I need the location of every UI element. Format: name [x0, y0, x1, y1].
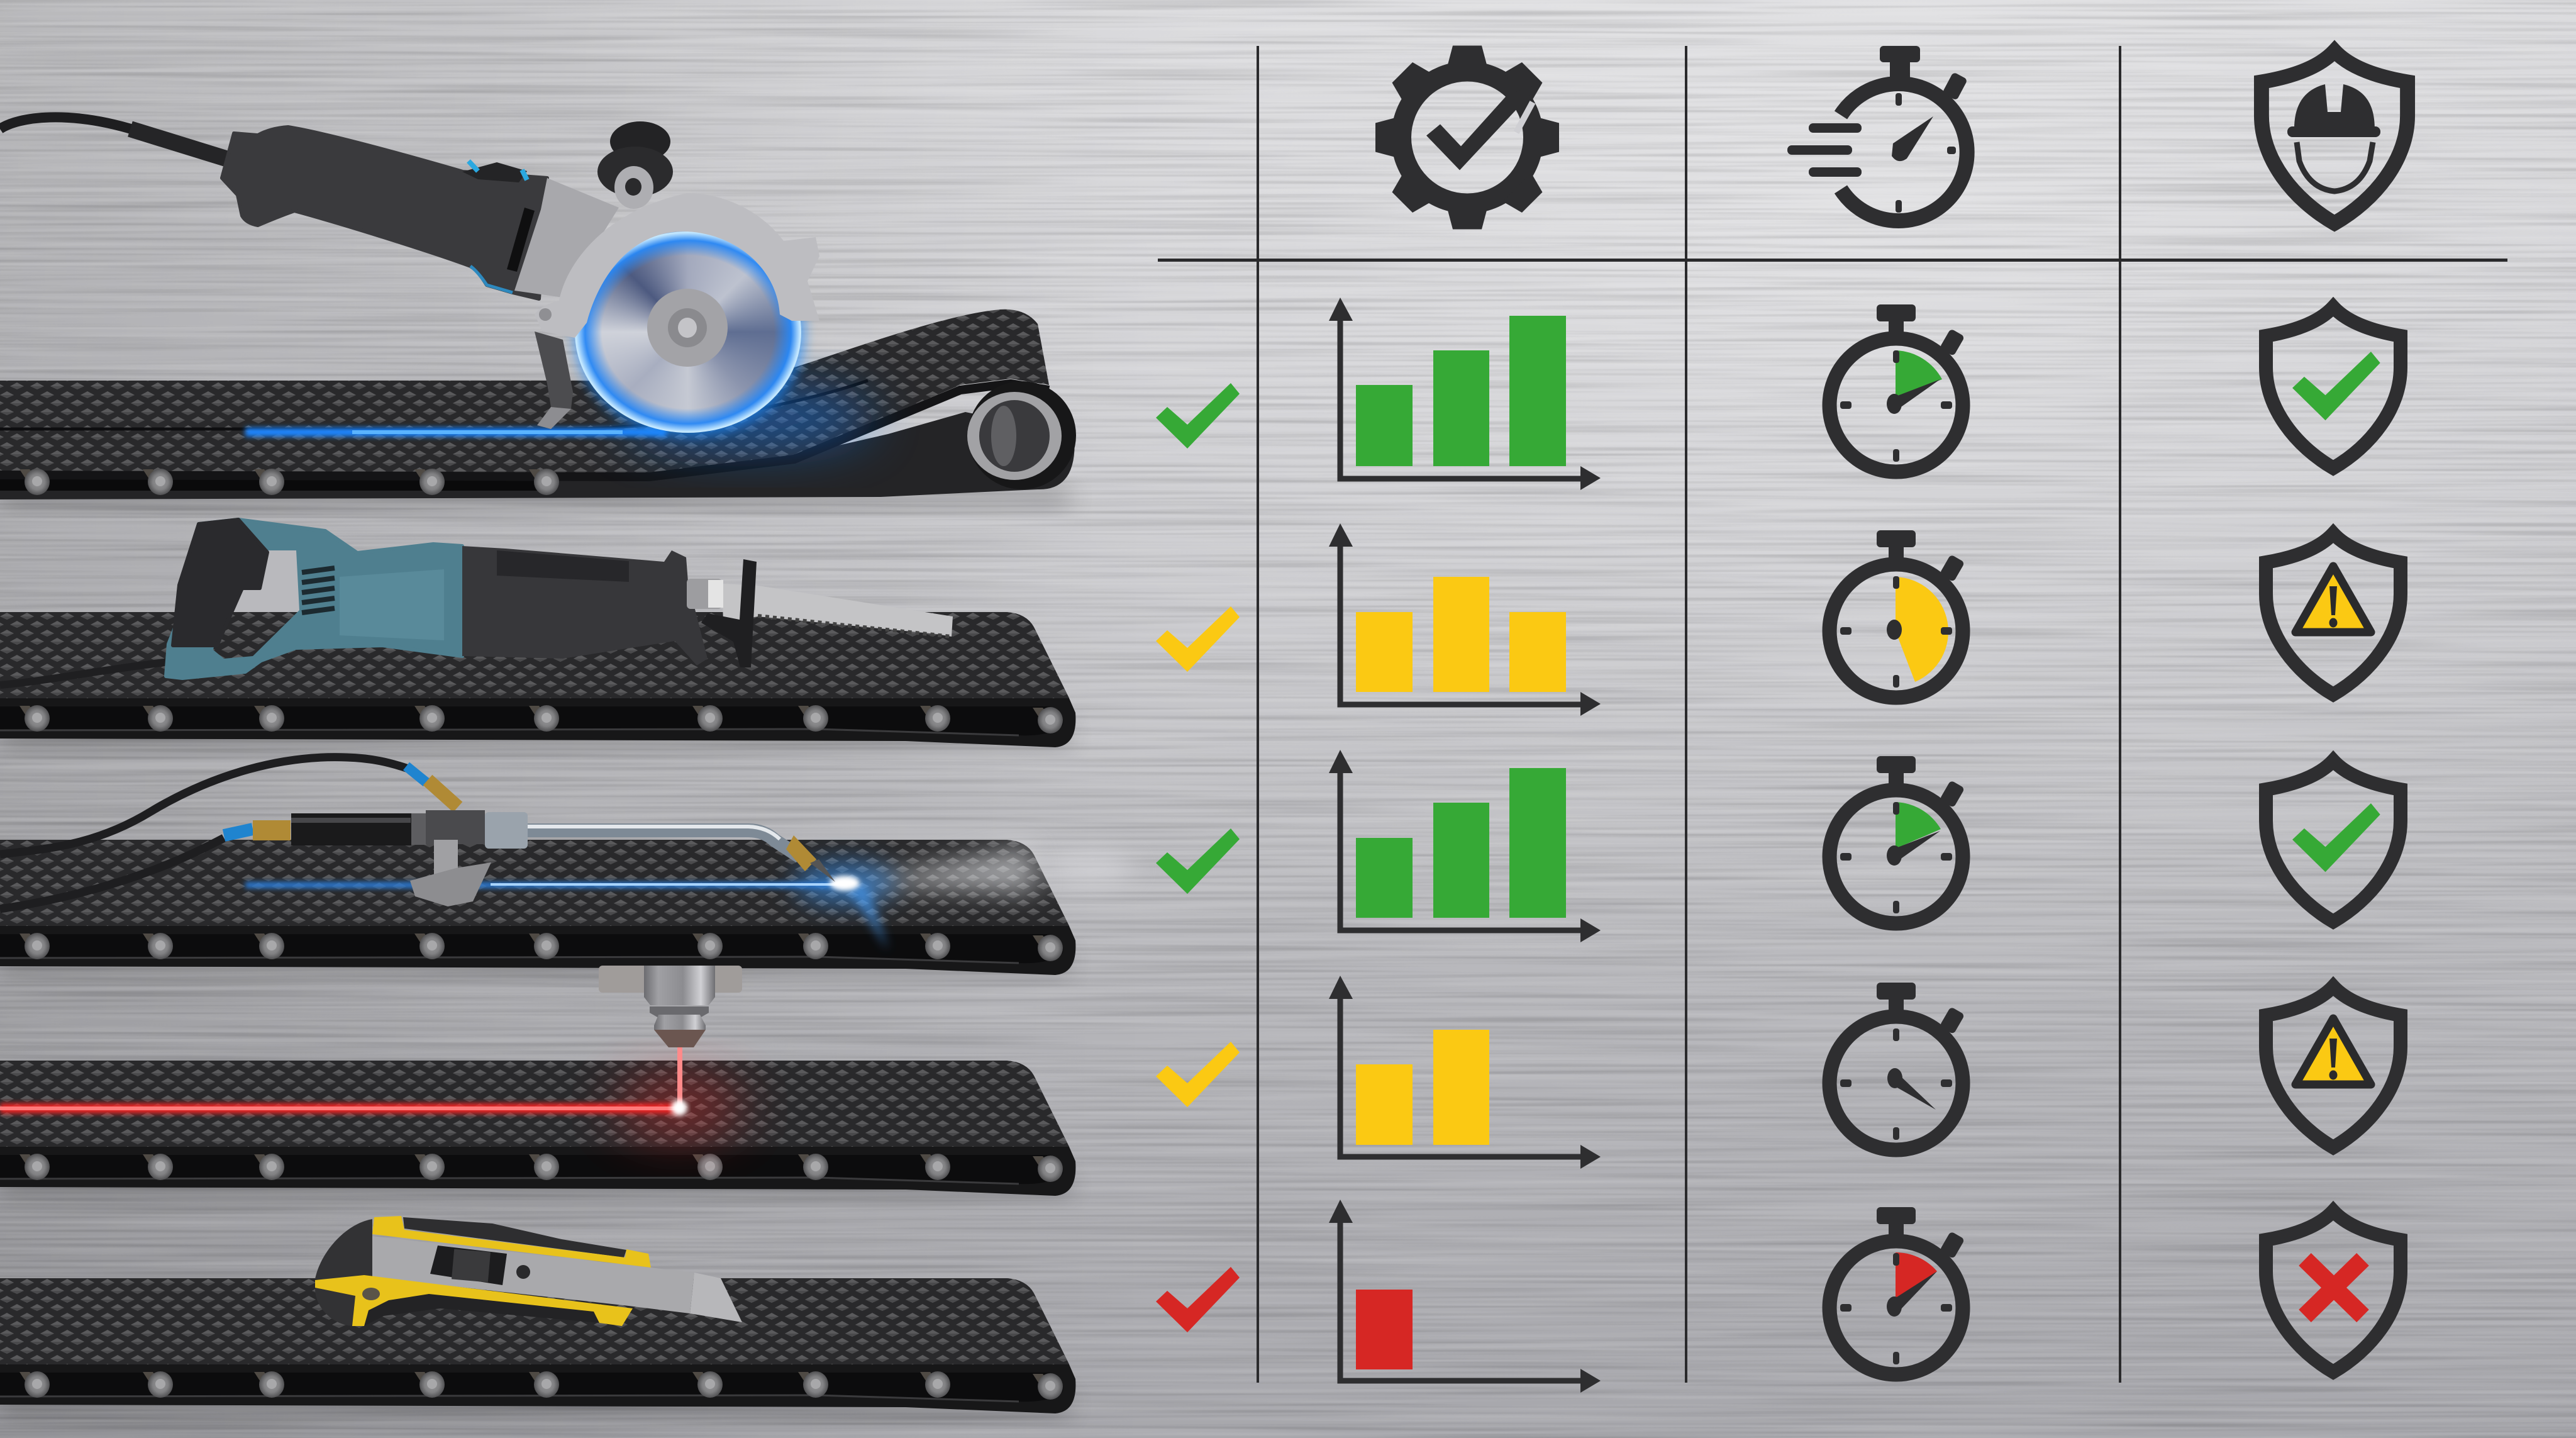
blue disc glow: [572, 229, 806, 438]
header icon: stopwatch with speed lines (speed): [1787, 46, 1968, 221]
hub: [647, 289, 728, 367]
angle grinder: [0, 117, 819, 438]
black barrel: [291, 813, 411, 845]
slider: [430, 1246, 507, 1285]
utility knife: [315, 1216, 742, 1326]
upper hose: [0, 757, 408, 854]
row 3 verdict check: [1156, 828, 1240, 894]
row 2 verdict check: [1156, 606, 1240, 672]
blade: [722, 584, 953, 637]
yellow top stripe: [372, 1216, 651, 1268]
row 4 bar chart: [1329, 976, 1601, 1169]
lever: [535, 332, 573, 429]
lower hose: [0, 838, 224, 909]
belt 4: [0, 1061, 1075, 1196]
comparison grid lines: [1158, 46, 2507, 1383]
row 4 stopwatch: [1829, 983, 1965, 1150]
rear handle lower: [315, 1288, 355, 1326]
water jet torch: [0, 757, 835, 909]
motor housing: [462, 546, 708, 666]
row 5 bar chart: [1329, 1200, 1601, 1393]
motor vents: [302, 568, 335, 613]
nozzle: [786, 835, 816, 871]
row 1 bar chart: [1329, 298, 1601, 490]
yellow lower stripe: [315, 1275, 633, 1326]
header icon: shield with hard hat (safety): [2262, 51, 2407, 223]
row 5 shield with cross: [2266, 1211, 2401, 1372]
reciprocating saw: [0, 520, 953, 685]
row 2 shield with warning: [2266, 533, 2401, 694]
collar: [514, 178, 619, 298]
row 1 verdict check: [1156, 383, 1240, 449]
chuck: [687, 579, 722, 609]
red laser line and spark: [0, 1047, 742, 1139]
foot: [434, 840, 458, 874]
laser cutting head: [599, 966, 742, 1047]
row 3 stopwatch: [1829, 756, 1965, 923]
row 2 bar chart: [1329, 523, 1601, 716]
guard: [535, 193, 819, 338]
blade tip: [690, 1273, 742, 1322]
lower black grip: [364, 1294, 599, 1326]
shoe: [701, 559, 757, 667]
row 1 shield with check: [2266, 307, 2401, 468]
rear handle upper: [315, 1219, 372, 1282]
blue cut glow on belt 1: [245, 387, 874, 450]
cord: [0, 662, 170, 685]
handle: [222, 127, 547, 299]
teal body: [166, 520, 462, 678]
row 3 bar chart: [1329, 750, 1601, 942]
row 4 shield with warning: [2266, 986, 2401, 1147]
row 4 verdict check: [1156, 1042, 1240, 1107]
row 2 stopwatch: [1829, 530, 1965, 698]
water jet glow: [245, 846, 1135, 950]
metal slide: [369, 1236, 694, 1313]
belt 3: [0, 840, 1075, 975]
cord: [0, 117, 135, 130]
roller: [967, 381, 1076, 489]
row 3 shield with check: [2266, 761, 2401, 922]
knob: [597, 121, 673, 209]
top grip: [403, 1217, 626, 1257]
row 5 stopwatch: [1829, 1207, 1965, 1374]
side panel: [340, 569, 444, 640]
disc: [575, 231, 801, 433]
handle opening: [213, 550, 299, 659]
belt 5: [0, 1278, 1075, 1415]
black grip: [173, 520, 267, 645]
row 5 verdict check: [1156, 1267, 1240, 1332]
tube: [522, 830, 800, 857]
row 1 stopwatch: [1829, 304, 1965, 472]
belt 2: [0, 612, 1075, 747]
belt 1: curved belt under angle grinder: [0, 309, 1076, 506]
header icon: gear with check (quality): [1375, 45, 1559, 229]
